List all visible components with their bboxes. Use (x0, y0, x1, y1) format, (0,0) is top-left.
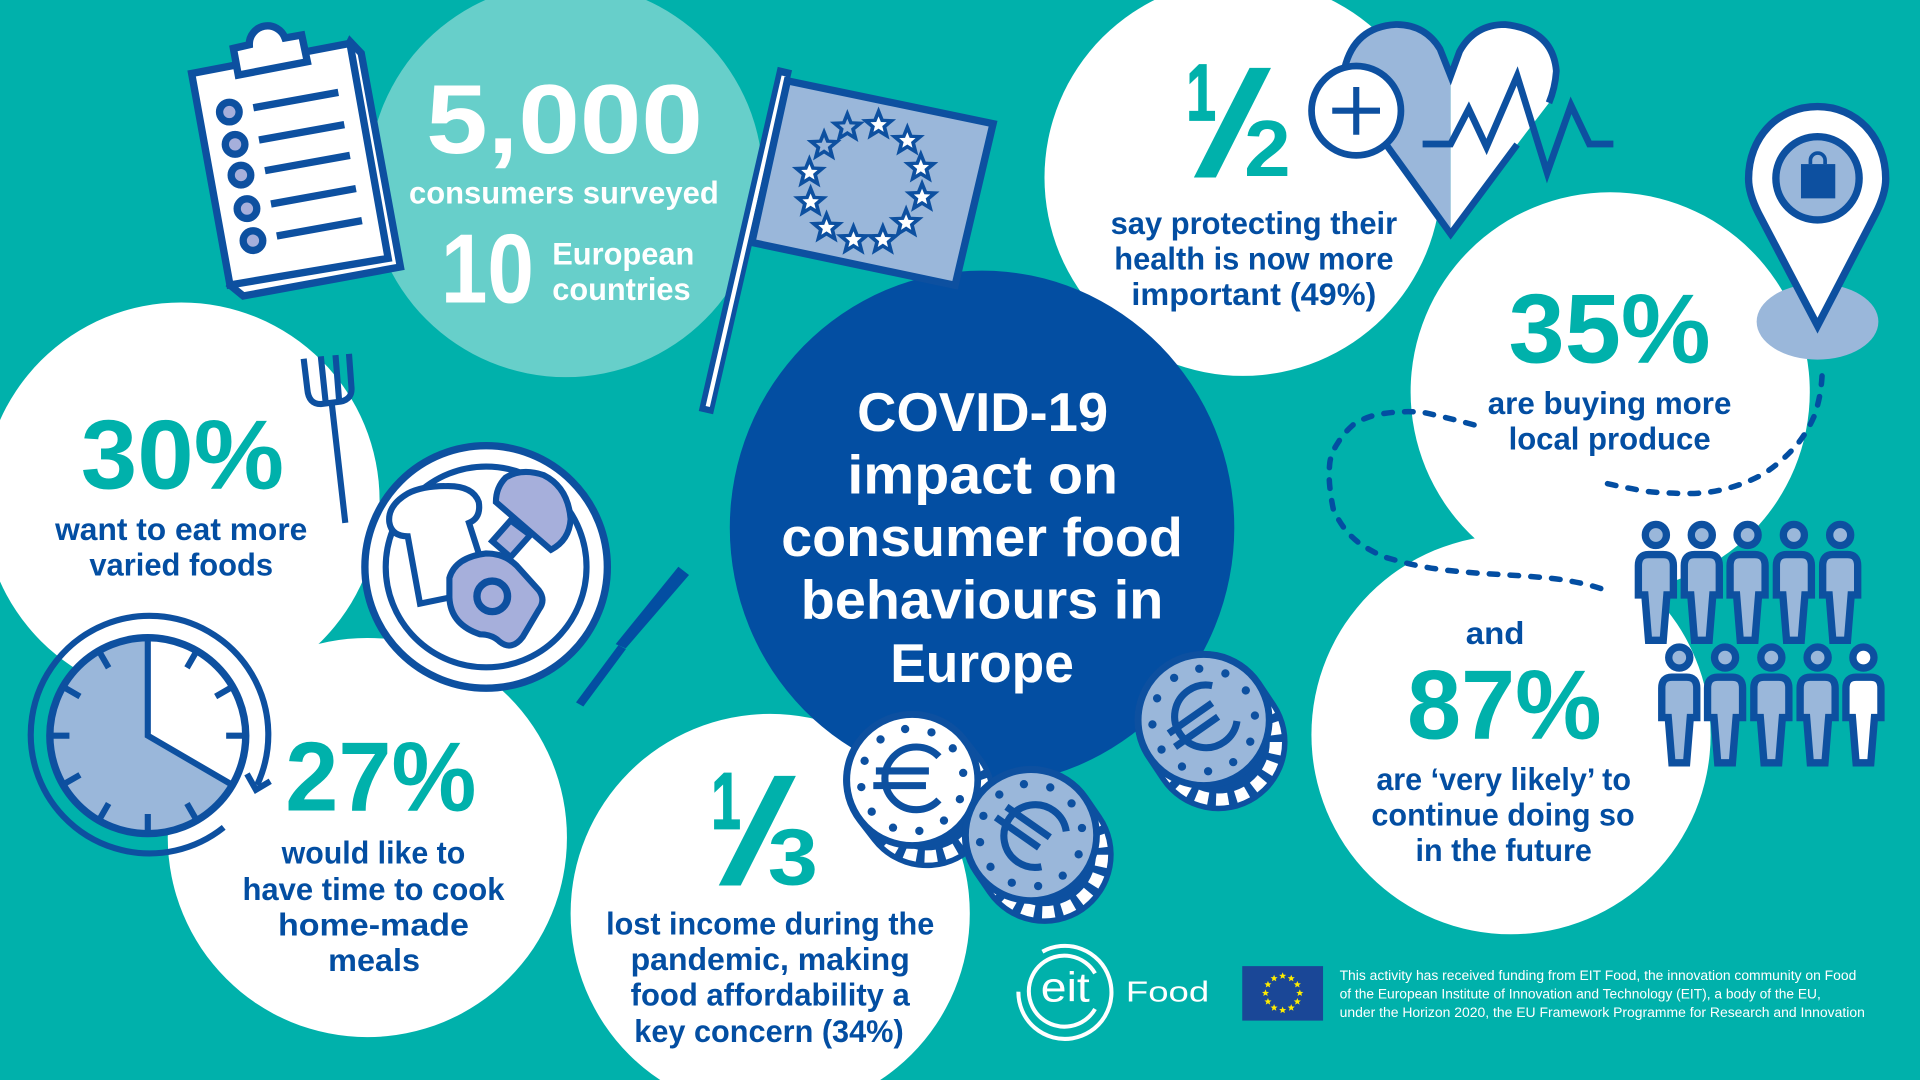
text: want to eat more varied foods (54, 511, 307, 583)
panel: central title circle (730, 271, 1234, 785)
text: are very likely to continue: continue doing so (1371, 796, 1635, 832)
text: want to eat more varied foods: varied foods (89, 547, 273, 583)
icon: location pin with shopping bag (1749, 107, 1886, 360)
text: are buying more local produce (1488, 385, 1731, 456)
text: are buying more local produce: are buying more (1488, 385, 1731, 421)
text: say protecting their health: health is now more (1114, 240, 1393, 276)
icon: heart with heartbeat (1312, 24, 1613, 235)
label: European countries: countries (552, 271, 691, 307)
label: European countries (552, 235, 694, 307)
text: say protecting their health (1111, 205, 1397, 312)
text: would like to have time to cook home-made meals: would like to (281, 834, 465, 870)
stat: 27%: 27% (285, 722, 476, 832)
icon: EU emblem flag (1242, 966, 1323, 1021)
text: would like to have time to cook home-made meals: home-made (278, 907, 469, 943)
stat: 5,000: 5,000 (426, 64, 703, 174)
icon: clipboard (192, 26, 400, 296)
label: European countries: European (552, 235, 694, 271)
stat: 10: 10 (441, 213, 534, 323)
text: want to eat more varied foods: want to eat more (54, 511, 307, 547)
arrow: clock rotation (31, 616, 270, 853)
text: would like to have time to cook home-made meals (242, 834, 505, 978)
icon: people group (1638, 524, 1881, 763)
panel: 87 percent circle (1311, 535, 1711, 934)
logo: EIT Food: Food (1126, 977, 1209, 1009)
panel: survey circle (369, 0, 763, 377)
text: say protecting their health: important (49%) (1131, 276, 1376, 312)
panel: one half circle (1044, 0, 1441, 376)
stat: 1/3: 3 (768, 813, 818, 902)
icon: plate of food (365, 446, 607, 688)
text: lost income during the pandemic (606, 905, 934, 1049)
panel: 27 percent circle (168, 638, 567, 1037)
text: are very likely to continue: are ‘very likely’ to (1376, 761, 1631, 797)
label: consumers surveyed: consumers surveyed (409, 174, 719, 210)
text: lost income during the pandemic: pandemic, making (631, 941, 910, 977)
logo: EIT Food: eit (1041, 964, 1090, 1011)
stat: 1/2: 1 (1187, 48, 1216, 137)
text: funding statement: This activity has received funding from EIT Food, the innovation community on Food (1340, 967, 1856, 983)
icon: coin blue upper (1138, 654, 1276, 800)
logo: EIT Food (1018, 946, 1209, 1039)
icon: EU flag (706, 69, 993, 413)
icon: coin white (847, 714, 984, 857)
icon: clock (31, 616, 270, 853)
text: would like to have time to cook home-made meals: have time to cook (242, 871, 505, 907)
dashed path: to people (1329, 412, 1609, 591)
text: would like to have time to cook home-made meals: meals (328, 942, 420, 978)
panel: 30 percent circle (0, 302, 380, 699)
title (781, 381, 1183, 694)
text: are very likely to continue (1371, 761, 1635, 868)
text: and: and (1466, 615, 1524, 651)
title: consumer food (781, 506, 1183, 568)
title: impact on (847, 443, 1118, 505)
stat: 1/3: / (719, 749, 797, 916)
panel: 35 percent circle (1411, 192, 1810, 591)
stat: 35%: 35% (1509, 273, 1711, 383)
icon: fork (304, 354, 352, 523)
icon: coin blue lower (966, 770, 1102, 912)
text: funding statement (1340, 967, 1865, 1020)
stat: 30%: 30% (81, 400, 284, 510)
text: funding statement: of the European Institute of Innovation and Technology (EIT), a body of the EU, (1340, 986, 1821, 1002)
stat: 1/2: 2 (1244, 104, 1291, 193)
title: behaviours in (801, 568, 1163, 630)
panel: one third circle (571, 714, 970, 1080)
text: lost income during the pandemic: key concern (34%) (634, 1013, 904, 1049)
stat: 87%: 87% (1407, 649, 1602, 759)
stat: 1/2: / (1194, 41, 1272, 208)
title: Europe (890, 632, 1074, 694)
dashed path: from pin to local produce (1599, 376, 1822, 493)
title: COVID-19 (857, 381, 1108, 443)
icon: knife (576, 567, 689, 707)
text: are buying more local produce: local produce (1509, 420, 1711, 456)
text: are very likely to continue: in the future (1416, 832, 1592, 868)
text: lost income during the pandemic: lost income during the (606, 905, 934, 941)
stat: 1/2 (1187, 41, 1291, 208)
stat: 1/3 (711, 749, 818, 916)
text: funding statement: under the Horizon 2020, the EU Framework Programme for Research and Innovation (1340, 1004, 1865, 1020)
text: say protecting their health: say protecting their (1111, 205, 1397, 241)
stat: 1/3: 1 (711, 756, 741, 845)
text: lost income during the pandemic: food affordability a (631, 976, 910, 1012)
